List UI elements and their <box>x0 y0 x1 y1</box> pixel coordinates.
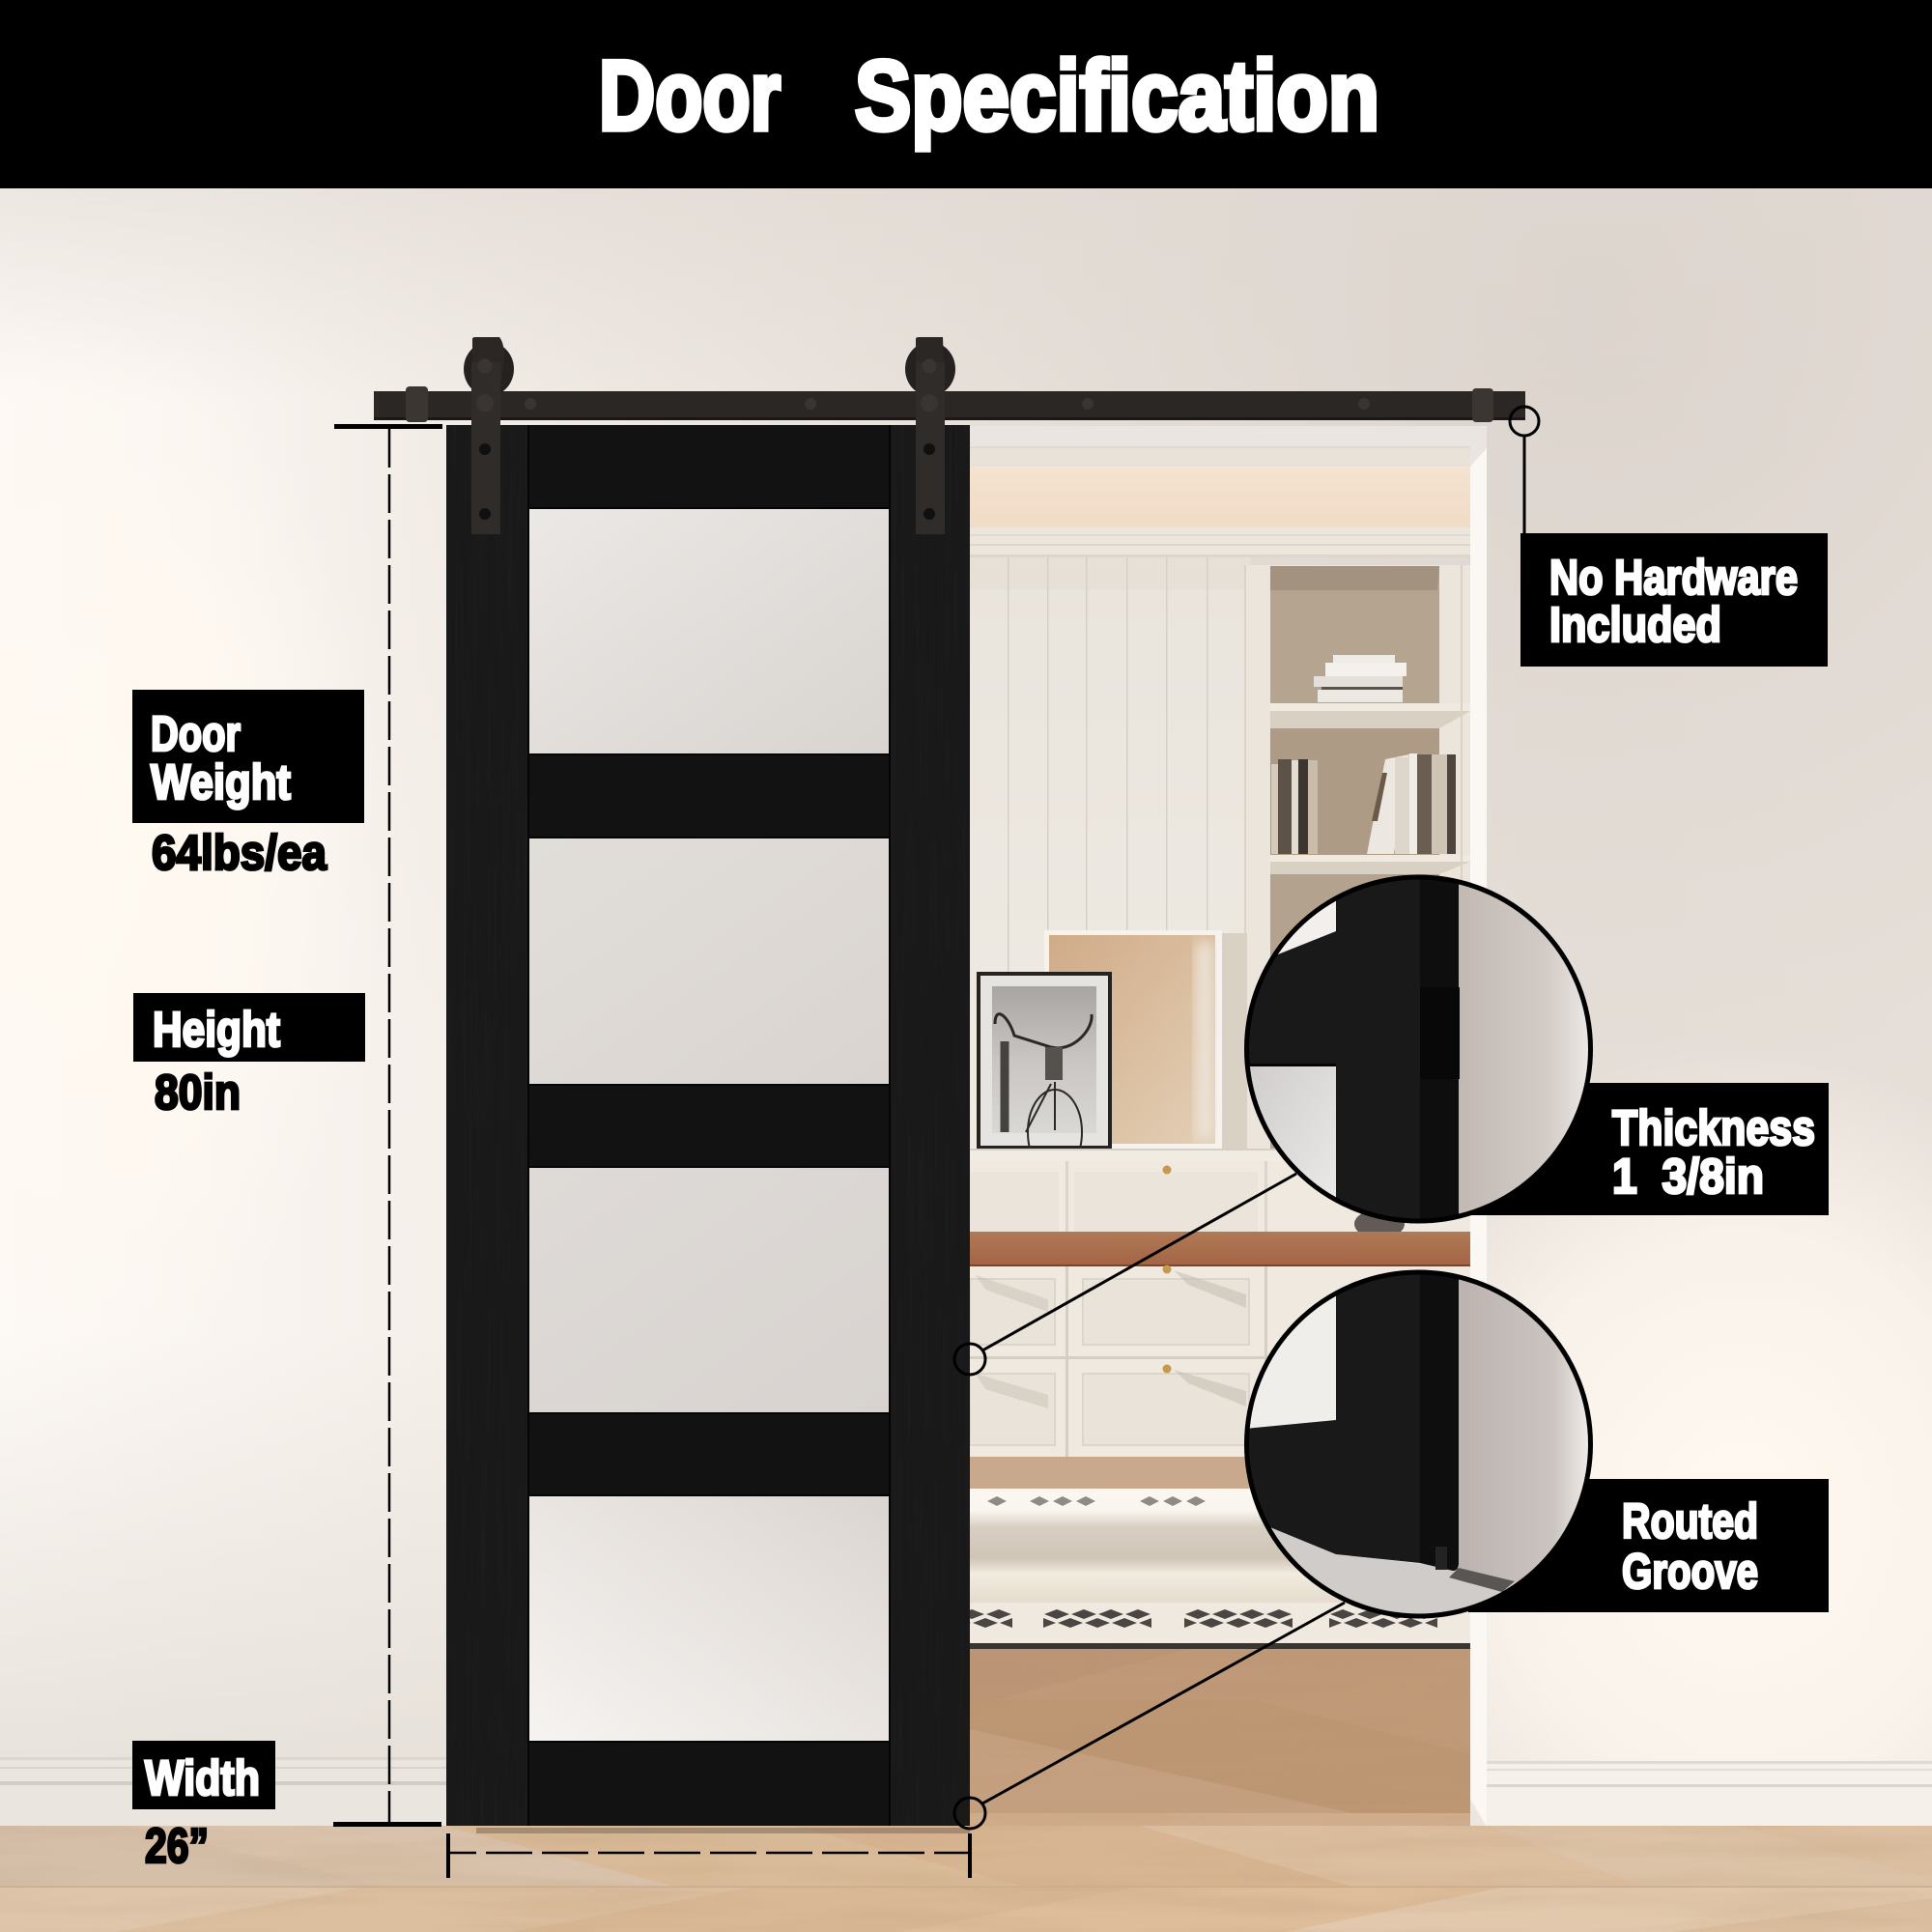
callout pointer: thickness <box>954 1174 1296 1375</box>
interior room seen through the doorway <box>958 448 1478 1826</box>
title: Specification <box>855 41 1379 151</box>
value: door weight: 64lbs/ea <box>152 825 327 880</box>
width dimension line <box>446 1833 972 1878</box>
label: no hardware included: No Hardware <box>1549 550 1798 605</box>
room wood floor <box>970 1649 1478 1826</box>
label: width: Width <box>145 1750 260 1805</box>
ceiling glow <box>970 448 1470 528</box>
door hanger right <box>905 337 955 534</box>
upper drawers <box>1034 1161 1439 1232</box>
title: Door <box>599 41 781 151</box>
label: door weight <box>132 690 364 823</box>
label: routed groove: Routed <box>1622 1493 1758 1548</box>
label: thickness: 1 3/8in <box>1612 1149 1764 1204</box>
rail stop right <box>1472 388 1493 422</box>
wood grain <box>446 425 970 1826</box>
rail seams <box>527 425 891 1826</box>
door stiles <box>446 425 970 1826</box>
baseboard: right <box>1487 1761 1932 1827</box>
stacked books <box>1314 655 1406 702</box>
frosted panel 4 <box>529 1495 889 1741</box>
door frame right jamb <box>970 426 1487 1827</box>
value: height: 80in <box>155 1065 241 1120</box>
label: height <box>133 993 365 1062</box>
sideboard top <box>970 1149 1285 1161</box>
lower cabinets <box>970 1265 1403 1457</box>
framed bicycle photo <box>977 972 1112 1149</box>
round ornament <box>1354 1213 1405 1232</box>
height dimension line <box>333 424 442 1827</box>
door hanger left <box>464 337 514 534</box>
header bar <box>0 0 1932 188</box>
value: width: 26” <box>145 1818 209 1873</box>
rug <box>958 1489 1470 1649</box>
upright books <box>1271 753 1456 854</box>
label: no hardware included: Included <box>1549 597 1721 652</box>
label: routed groove <box>1468 1479 1829 1612</box>
callout pointer: groove <box>954 1603 1345 1829</box>
sliding track rail <box>374 386 1525 422</box>
label: thickness <box>1468 1083 1829 1215</box>
label: thickness: Thickness <box>1612 1100 1815 1155</box>
barn door <box>446 425 970 1826</box>
walnut counter <box>970 1232 1470 1266</box>
rail stop left <box>406 386 428 422</box>
label: no hardware included <box>1520 533 1828 667</box>
frosted panel 3 <box>529 1167 889 1412</box>
magnifier: routed groove detail <box>1244 1270 1594 1618</box>
wall panelling <box>1008 557 1244 972</box>
rail bolts <box>525 398 1370 410</box>
label: routed groove: Groove <box>1622 1544 1758 1599</box>
bicycle <box>993 1012 1094 1146</box>
label: door weight: Weight <box>151 754 291 810</box>
callout pointer: hardware <box>1510 407 1539 533</box>
magnifier: door thickness detail <box>1244 875 1594 1224</box>
baseboard: left <box>0 1757 446 1827</box>
label: height: Height <box>153 1002 280 1057</box>
crown molding <box>970 527 1470 557</box>
beige art print <box>1044 930 1247 1151</box>
bookcase <box>1244 565 1470 1154</box>
floor: herringbone wood <box>0 1826 1932 1932</box>
frosted panel 1 <box>529 509 889 754</box>
door frame rails and stiles <box>446 425 970 1826</box>
label: door weight: Door <box>151 706 241 761</box>
room floor strip <box>970 1457 1250 1489</box>
frosted panel 2 <box>529 838 889 1084</box>
title <box>599 41 1379 151</box>
